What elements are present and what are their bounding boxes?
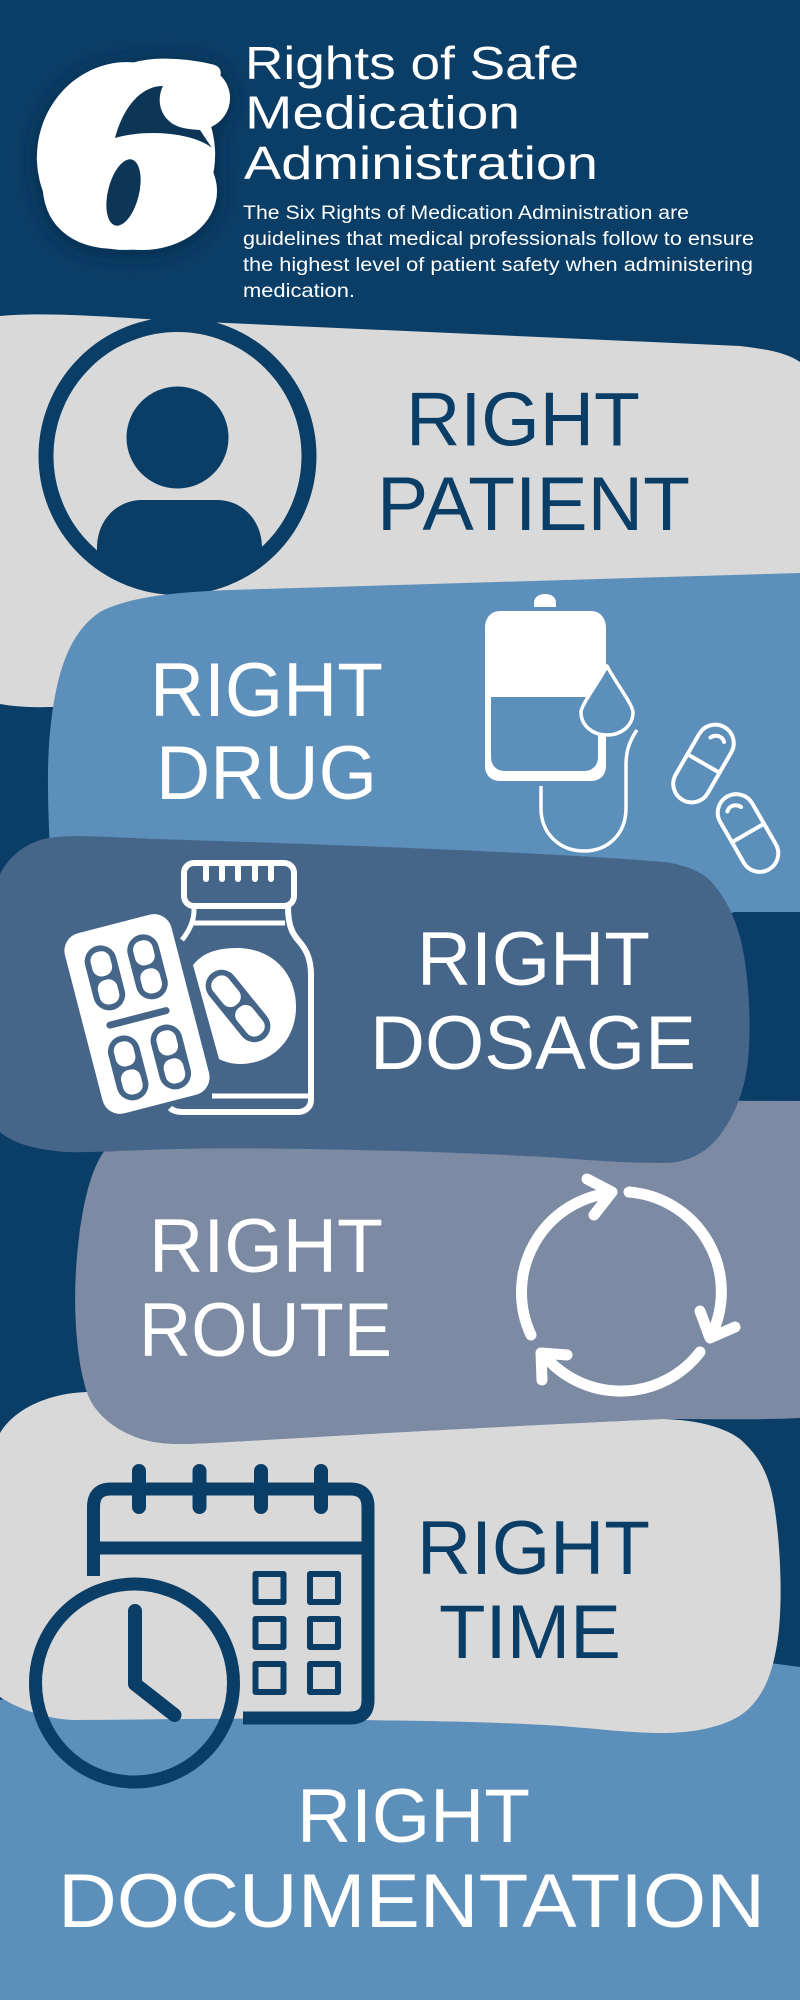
label: right route: RIGHT — [149, 1204, 383, 1289]
intro paragraph: guidelines that medical professionals follow to ensure — [243, 228, 754, 250]
icon: two capsules — [666, 718, 785, 879]
label: right dosage — [370, 917, 696, 1086]
title: Medication — [245, 86, 520, 138]
intro paragraph: the highest level of patient safety when administering — [243, 254, 753, 276]
icon: iv bag — [485, 594, 637, 851]
panel: right drug — [48, 573, 800, 1000]
label: right route — [139, 1204, 392, 1373]
label: right time — [417, 1506, 650, 1675]
panel: right documentation — [0, 1600, 800, 2000]
label: right drug: DRUG — [156, 731, 377, 816]
icon: person in ring — [46, 324, 309, 600]
dosage blob — [0, 836, 750, 1163]
time blob — [0, 1392, 781, 1733]
panel: right time — [0, 1392, 781, 1782]
title: Rights of Safe — [245, 37, 579, 89]
label: right documentation — [58, 1774, 765, 1944]
panel: right dosage — [0, 836, 750, 1163]
panel: right patient — [0, 314, 800, 707]
documentation blob — [0, 1600, 800, 2000]
intro paragraph — [243, 202, 754, 302]
title — [244, 37, 598, 189]
panel: right route — [75, 1100, 800, 1444]
label: right patient: PATIENT — [377, 462, 690, 547]
label: right time: RIGHT — [417, 1506, 650, 1591]
route blob — [75, 1100, 800, 1444]
label: right patient — [377, 378, 690, 547]
icon: calendar — [94, 1471, 368, 1718]
icon: pill bottle — [170, 863, 311, 1112]
label: right dosage: RIGHT — [417, 917, 650, 1002]
number six: 6 — [42, 8, 210, 294]
label: right route: ROUTE — [139, 1288, 392, 1373]
label: right drug: RIGHT — [150, 648, 383, 733]
label: right dosage: DOSAGE — [370, 1001, 696, 1086]
icon: clock — [36, 1584, 234, 1782]
label: right documentation: DOCUMENTATION — [58, 1859, 765, 1944]
drug blob — [48, 573, 800, 1000]
icon: blister pack — [60, 910, 214, 1118]
label: right drug — [150, 648, 383, 816]
patient blob — [0, 314, 800, 707]
icon: cycle arrows — [521, 1179, 735, 1391]
title: Administration — [244, 137, 598, 189]
label: right time: TIME — [439, 1590, 621, 1675]
intro paragraph: The Six Rights of Medication Administration are — [243, 202, 689, 224]
label: right patient: RIGHT — [406, 378, 640, 462]
label: right documentation: RIGHT — [297, 1774, 530, 1859]
intro paragraph: medication. — [243, 280, 355, 302]
